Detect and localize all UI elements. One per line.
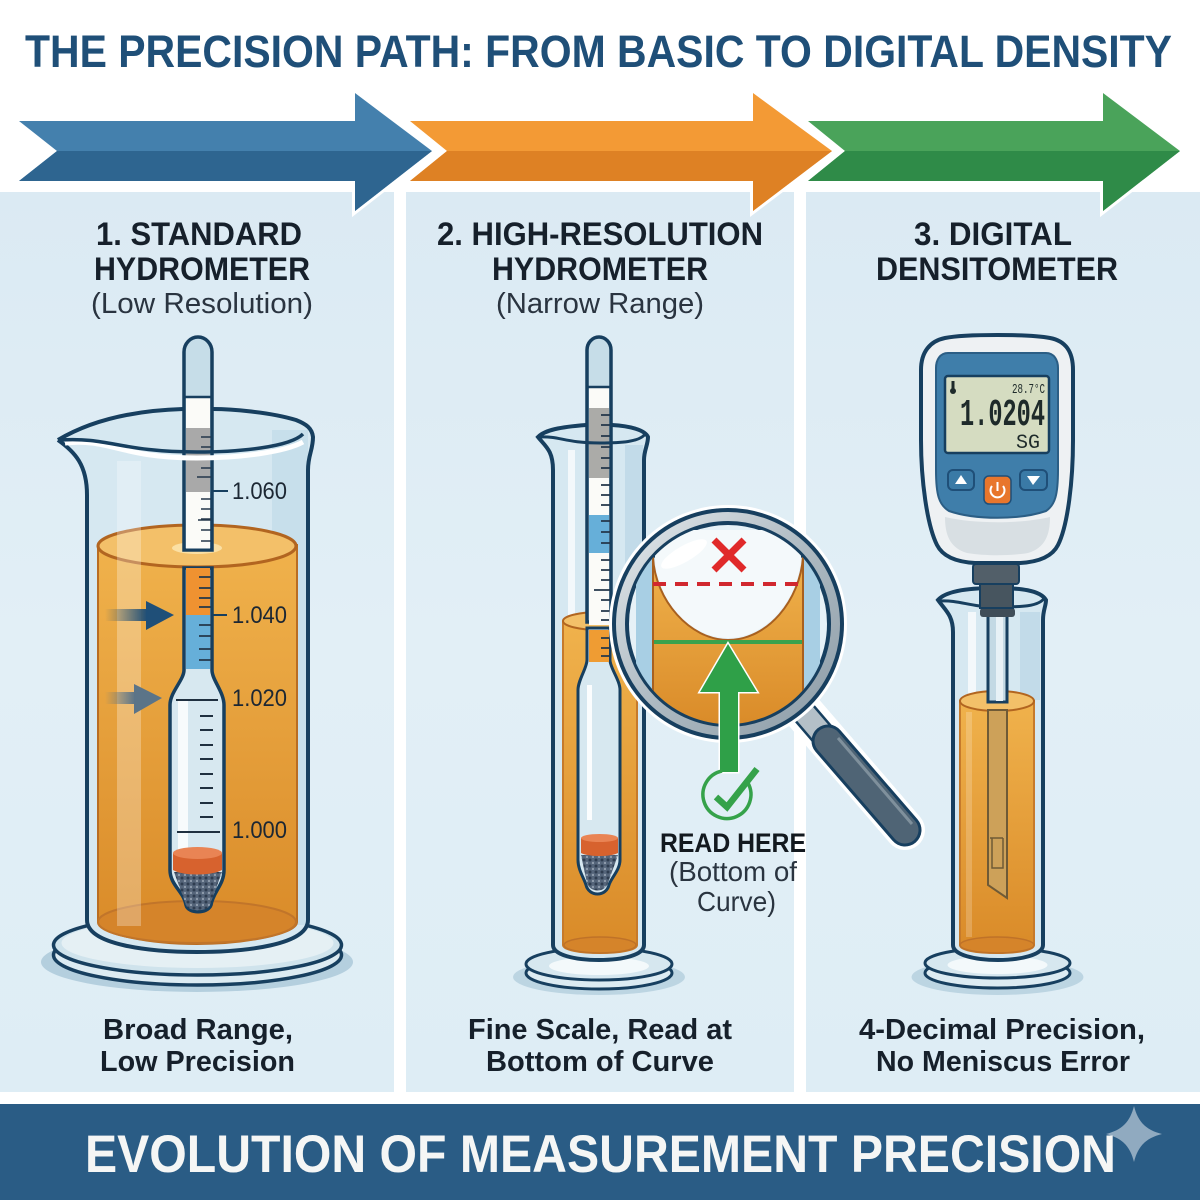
heading: panel 1: (Low Resolution): [91, 288, 313, 320]
caption: panel 3: [859, 1014, 1145, 1078]
scale labels: 1.000: [232, 817, 287, 844]
cylinder glass: [538, 425, 648, 960]
LCD screen: [945, 376, 1049, 455]
scale labels: 1.040: [232, 602, 287, 629]
magnifier: [609, 505, 912, 830]
arrow: step 3 green: [808, 93, 1180, 211]
callout: read here: [660, 828, 806, 917]
beaker outline: [58, 409, 313, 952]
caption: panel 3: No Meniscus Error: [876, 1046, 1130, 1078]
device body: [921, 335, 1073, 563]
reading arrow: lower: [105, 684, 162, 714]
illustration: wide beaker with standard hydrometer: [41, 337, 353, 992]
scale labels: 1.020: [232, 685, 287, 712]
scale labels: 1.060: [232, 478, 287, 505]
probe: [980, 608, 1015, 898]
illustration: narrow cylinder with hydrometer: [513, 337, 685, 995]
heading: panel 3: DENSITOMETER: [876, 251, 1118, 287]
heading: panel 1: 1. STANDARD: [96, 216, 302, 252]
callout: read here: (Bottom of: [669, 856, 797, 887]
cylinder outline: [538, 425, 648, 960]
caption: panel 2: Bottom of Curve: [486, 1046, 714, 1078]
caption: panel 2: [468, 1014, 732, 1078]
cylinder front rim: [540, 434, 645, 443]
red wrong-reading line: [653, 582, 803, 586]
callout: read here: Curve): [697, 886, 776, 917]
green up arrow: [700, 644, 757, 772]
footer text: EVOLUTION OF MEASUREMENT PRECISION: [85, 1125, 1116, 1184]
LCD screen: 28.7°C: [1012, 382, 1045, 398]
arrow: step 2 orange: [410, 93, 832, 211]
cylinder glass: [938, 588, 1046, 960]
liquid: [98, 525, 297, 944]
heading: panel 1: HYDROMETER: [94, 251, 310, 287]
green correct-reading line: [654, 640, 802, 644]
magnifier handle: [800, 708, 912, 830]
panel: digital densitometer background: [806, 192, 1200, 1092]
cylinder base: [912, 948, 1084, 995]
hydrometer: [170, 337, 224, 912]
caption: panel 2: Fine Scale, Read at: [468, 1014, 732, 1046]
footer band: [0, 1104, 1200, 1200]
cylinder base: [513, 948, 685, 995]
illustration: cylinder with digital densitometer: [912, 588, 1084, 995]
lens content: magnified meniscus: [636, 520, 820, 730]
power button: [984, 476, 1011, 504]
caption: panel 1: [100, 1014, 295, 1078]
heading: panel 3: [876, 216, 1118, 287]
beaker front rim: [60, 434, 303, 458]
panel: standard hydrometer background: [0, 192, 394, 1092]
scale labels: [213, 478, 287, 844]
cylinder liquid: [563, 612, 637, 953]
heading: panel 2: (Narrow Range): [496, 288, 704, 320]
beaker glass: [58, 409, 313, 952]
hydrometer: [578, 337, 620, 894]
heading: panel 3: 3. DIGITAL: [914, 216, 1072, 252]
LCD screen: SG: [1016, 432, 1040, 455]
cylinder liquid: [960, 691, 1034, 953]
callout: read here: READ HERE: [660, 828, 806, 858]
device blue face: [936, 353, 1058, 518]
heading: panel 2: [437, 216, 763, 320]
reading arrow: upper: [105, 601, 174, 630]
icon: sparkle: [1106, 1106, 1162, 1162]
beaker base: [41, 915, 353, 992]
digital densitometer device: [921, 335, 1073, 608]
red cross: [714, 540, 744, 570]
green check icon: [703, 769, 757, 818]
heading: panel 2: 2. HIGH-RESOLUTION: [437, 216, 763, 252]
up button: [948, 470, 974, 490]
heading: panel 2: HYDROMETER: [492, 251, 708, 287]
connector: [973, 564, 1019, 608]
caption: panel 3: 4-Decimal Precision,: [859, 1014, 1145, 1046]
lens ring: [609, 505, 847, 743]
LCD screen: 1.0204: [960, 394, 1045, 437]
arrow: step 1 blue: [19, 93, 432, 211]
caption: panel 1: Low Precision: [100, 1046, 295, 1078]
panel: high-resolution hydrometer background: [406, 192, 794, 1092]
caption: panel 1: Broad Range,: [103, 1014, 293, 1046]
down button: [1020, 470, 1047, 490]
heading: panel 1: [91, 216, 313, 320]
